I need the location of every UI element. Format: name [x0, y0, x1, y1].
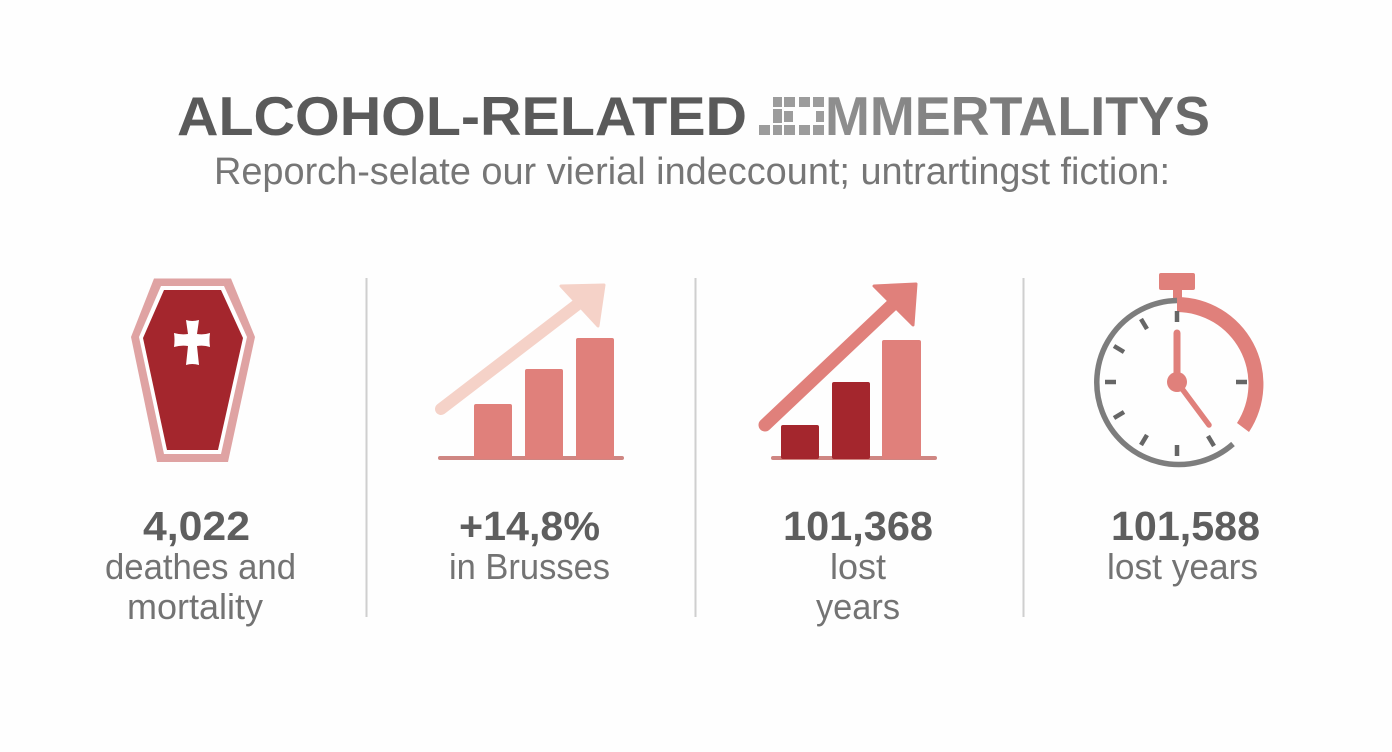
icon: stopwatch: [1097, 273, 1263, 464]
panel: lost years stat: [765, 284, 937, 627]
title glitch blocks: [759, 97, 824, 135]
panel: coffin stat: [105, 278, 296, 627]
title: MMERTALITYS: [825, 85, 1210, 147]
stat: 4,022: 4,022: [143, 503, 250, 549]
label: lost years: lost: [830, 546, 886, 587]
icon: rising bar chart with dark bars: [765, 284, 937, 460]
stat: 101,368: 101,368: [783, 503, 933, 549]
label: deathes and mortality: mortality: [127, 586, 263, 627]
label: lost years: lost years: [1107, 546, 1258, 587]
title: ALCOHOL-RELATED: [177, 85, 747, 147]
label: lost years: [816, 546, 900, 627]
stat: 101,588: 101,588: [1111, 503, 1260, 549]
label: in Brusses: in Brusses: [449, 546, 610, 587]
label: deathes and mortality: [105, 546, 296, 627]
icon: coffin: [131, 278, 255, 462]
label: lost years: years: [816, 586, 900, 627]
stat: +14,8%: +14,8%: [459, 503, 600, 549]
panel: stopwatch stat: [1097, 273, 1263, 587]
subtitle: Reporch-selate our vierial indeccount; untrartingst fiction:: [214, 151, 1170, 193]
title: [177, 85, 1210, 147]
panel: growth stat: [438, 285, 624, 587]
label: deathes and mortality: deathes and: [105, 546, 296, 587]
icon: rising bar chart with pale arrow: [438, 285, 624, 460]
